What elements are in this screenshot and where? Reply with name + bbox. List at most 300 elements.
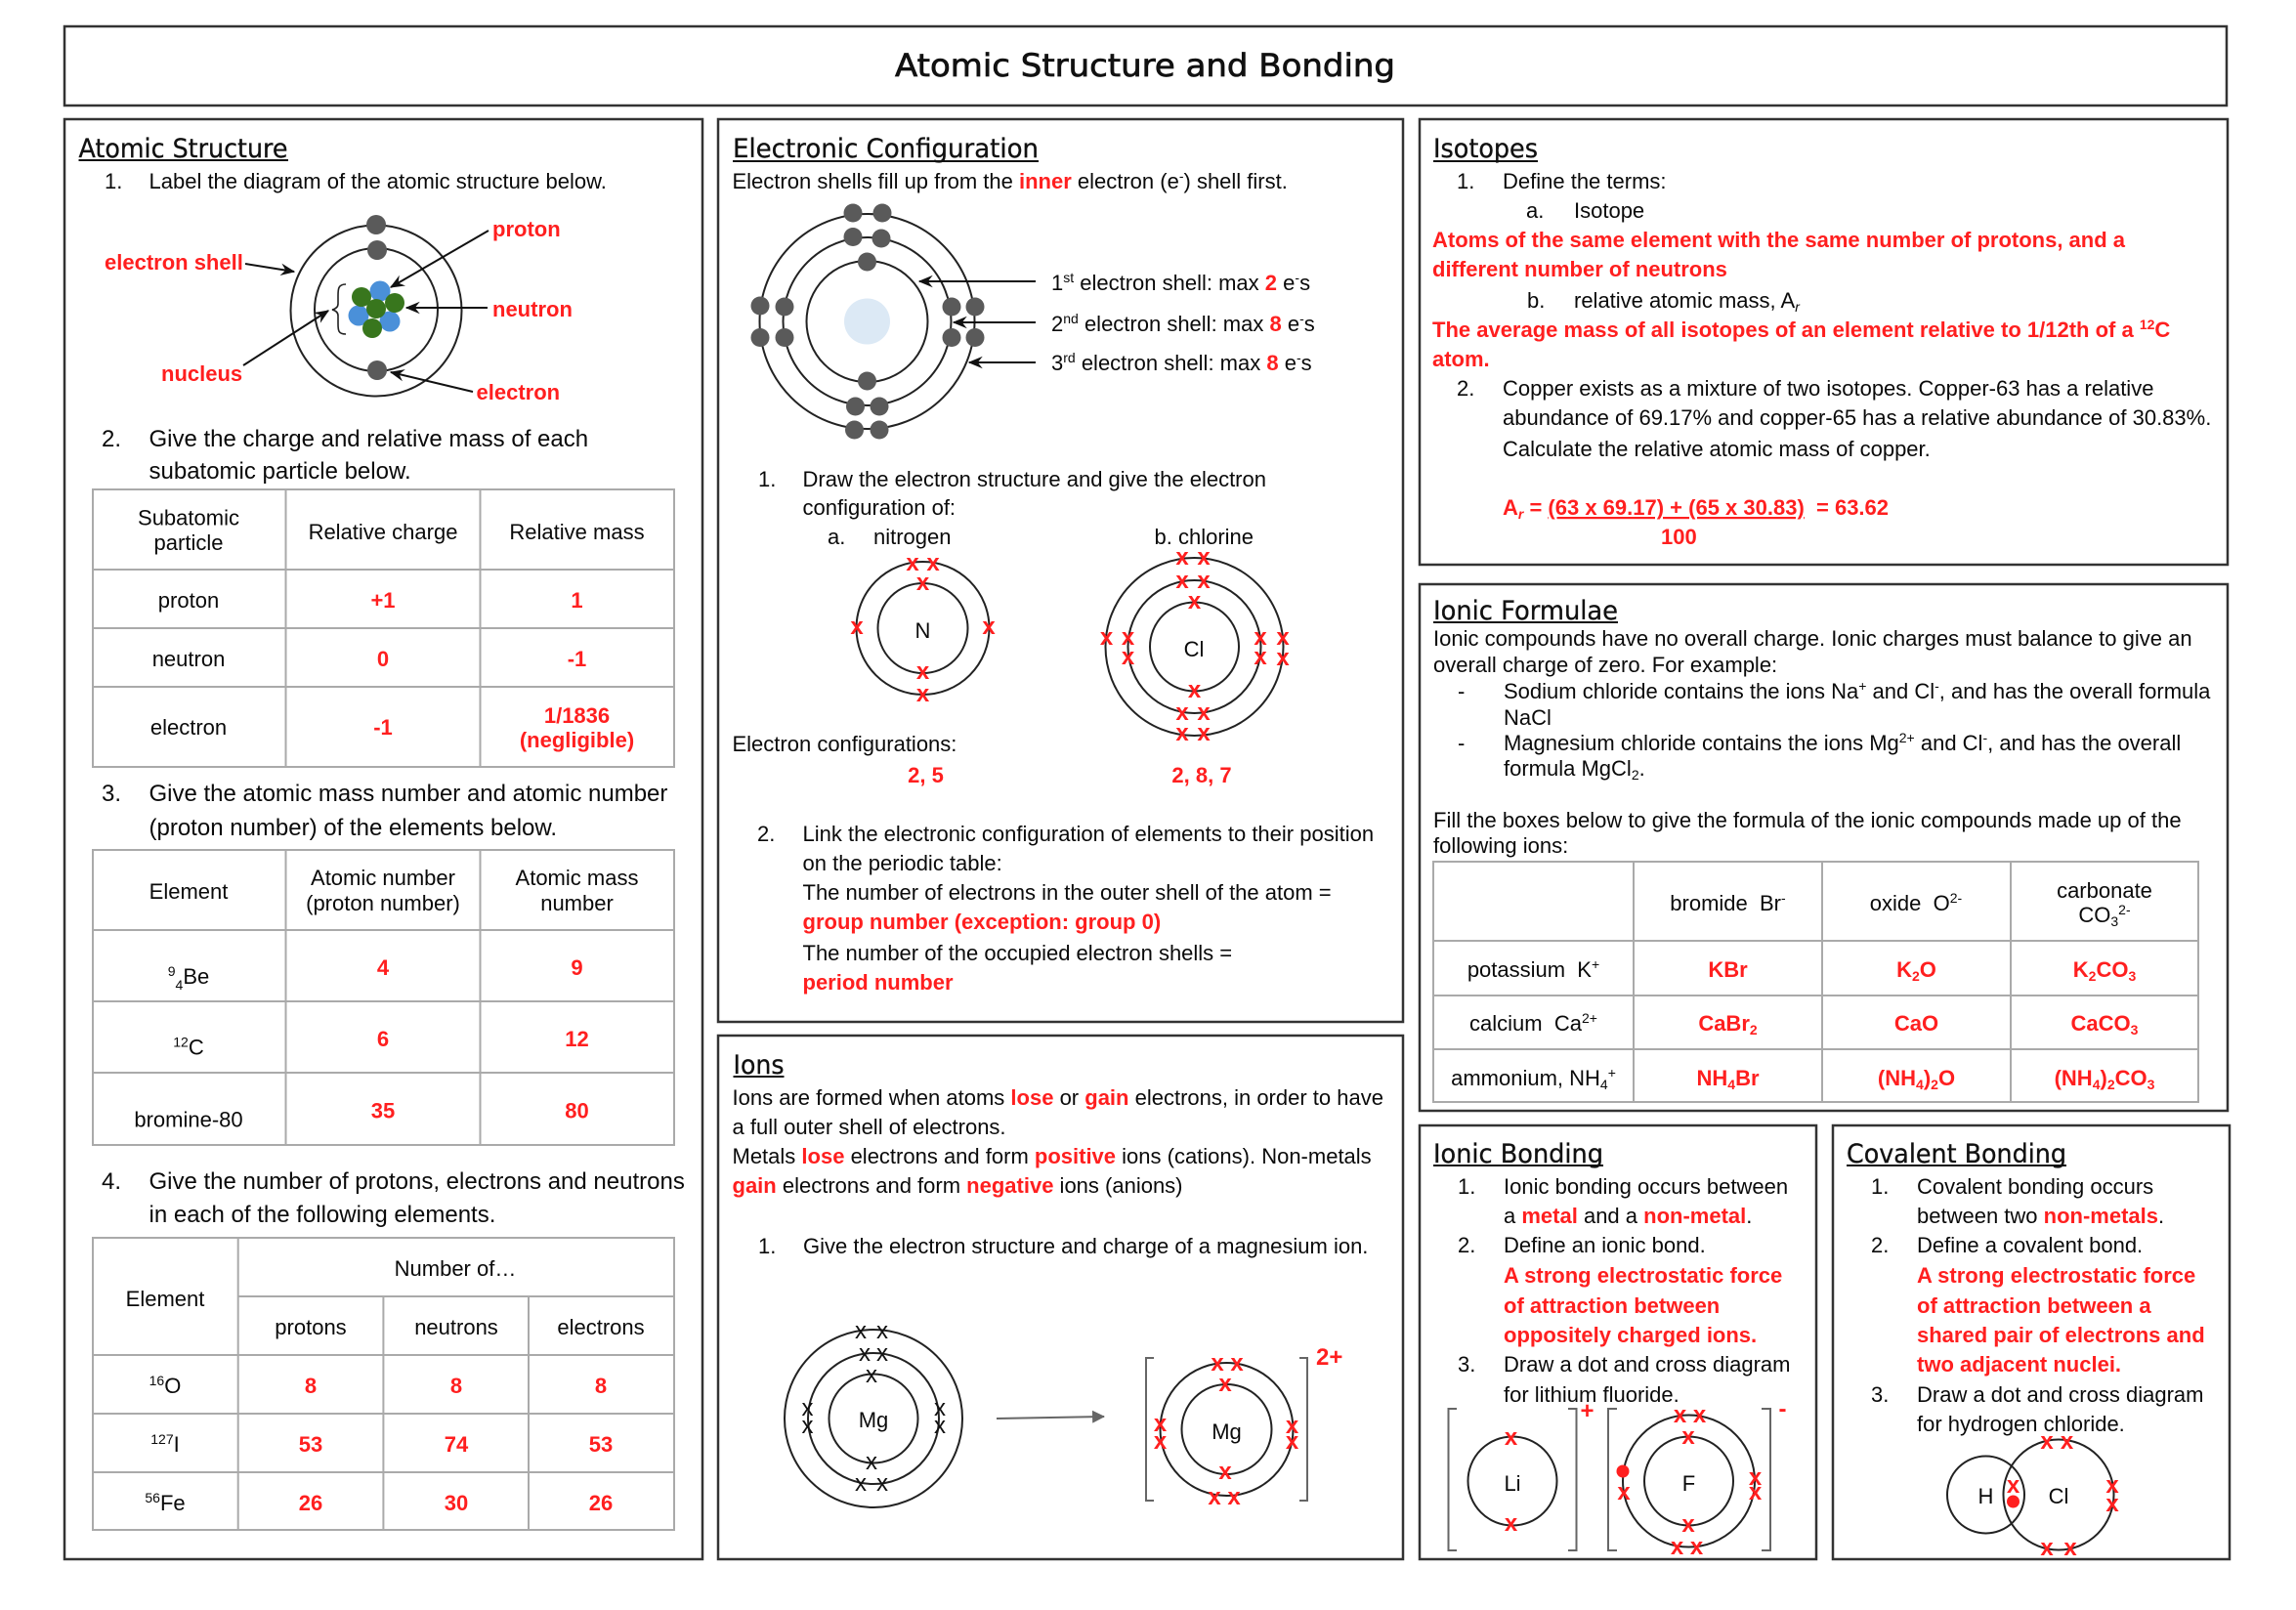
question 1 text: 1. <box>758 467 776 491</box>
table: ionic compounds: + <box>1608 1065 1616 1080</box>
diagram: nitrogen atom: x <box>850 614 864 640</box>
diagram: magnesium ion: x <box>1218 1459 1232 1485</box>
table: subatomic particles <box>93 489 674 767</box>
table: ionic compounds: ammonium, NH <box>1451 1066 1600 1090</box>
covalent bonding text: between two non-metals. <box>1917 1204 2164 1228</box>
table: protons neutrons electrons: 56 <box>145 1490 160 1505</box>
diagram: magnesium atom: x <box>859 1340 871 1367</box>
diagram: fluoride ion: x <box>1749 1464 1763 1491</box>
table: ionic compounds: 3 <box>2131 1022 2139 1038</box>
table: ionic compounds: 2 <box>2107 1077 2115 1092</box>
table: elements: (proton number) <box>306 891 460 915</box>
table: elements: Element <box>149 879 228 904</box>
table: ionic compounds: 2- <box>2118 902 2131 917</box>
table: elements: 4 <box>377 955 390 980</box>
copper question: abundance of 69.17% and copper-65 has a relative abundance of 30.83%. <box>1503 405 2211 430</box>
table: protons neutrons electrons: 127 <box>150 1431 174 1447</box>
isotope definitions <box>1432 169 2170 371</box>
table: ionic compounds: CO <box>2115 1066 2147 1090</box>
panel: ions <box>718 1036 1403 1559</box>
table: subatomic particles: (negligible) <box>520 728 634 752</box>
table: protons neutrons electrons: Element <box>126 1287 204 1311</box>
diagram: fluoride ion: x <box>1671 1534 1684 1560</box>
ionic bonding text: for lithium fluoride. <box>1504 1382 1679 1407</box>
ionic formulae text: Sodium chloride contains the ions Na <box>1504 679 1858 703</box>
table: ionic compounds: ) <box>2100 1066 2107 1090</box>
diagram: electron shells: electron shell: max <box>1079 312 1269 336</box>
title: Atomic Structure and Bonding <box>895 47 1395 84</box>
diagram: hydrogen chloride: x <box>2105 1491 2119 1517</box>
table: ionic compounds: (NH <box>2055 1066 2093 1090</box>
question 2 text: Link the electronic configuration of elements to their position <box>803 822 1374 846</box>
diagram: chlorine atom: x <box>1276 624 1290 651</box>
diagram: electron shells: 3 <box>1051 351 1063 375</box>
diagram: magnesium atom: Mg <box>859 1408 888 1432</box>
table: elements: number <box>540 891 614 915</box>
isotope definitions: Isotope <box>1574 198 1644 223</box>
table: elements: C <box>189 1036 204 1059</box>
question 1 text: nitrogen <box>873 525 952 549</box>
table: ionic compounds: 2+ <box>1582 1010 1597 1026</box>
diagram: fluoride ion: x <box>1749 1479 1763 1505</box>
table: protons neutrons electrons: 74 <box>445 1432 469 1457</box>
covalent bonding text: Define a covalent bond. <box>1917 1233 2143 1257</box>
covalent bonding text: of attraction between a <box>1917 1293 2151 1318</box>
arrow <box>997 1417 1104 1419</box>
table: subatomic particles: electron <box>150 715 227 740</box>
diagram: magnesium atom: x <box>934 1395 946 1421</box>
diagram: labelled atom: nucleus <box>161 361 242 386</box>
diagram: nitrogen atom: x <box>916 658 930 685</box>
table: subatomic particles: Relative charge <box>309 520 457 544</box>
diagram: fluoride ion <box>1608 1396 1786 1560</box>
diagram: labelled atom: electron shell <box>105 250 243 275</box>
diagram: nitrogen atom: x <box>926 550 940 576</box>
diagram: magnesium ion: 2+ <box>1316 1344 1342 1371</box>
question 2 <box>102 426 588 485</box>
diagram: electron shells: 2 <box>1051 312 1063 336</box>
table: ionic compounds: bromide Br <box>1670 891 1781 915</box>
ions text: a full outer shell of electrons. <box>733 1115 1006 1139</box>
table: ionic compounds: potassium K <box>1467 957 1592 982</box>
table: protons neutrons electrons: Number of… <box>395 1256 516 1281</box>
table: elements: 12 <box>565 1027 589 1051</box>
diagram: hydrogen chloride: H <box>1978 1484 1993 1508</box>
ionic formulae text: , and has the overall formula <box>1939 679 2211 703</box>
ionic formulae text: - <box>1458 731 1465 755</box>
table: elements: bromine-80 <box>134 1108 243 1131</box>
ionic bonding text <box>1458 1174 1790 1407</box>
covalent bonding text: shared pair of electrons and <box>1917 1323 2205 1347</box>
diagram: nitrogen atom: x <box>916 681 930 707</box>
ionic formulae text <box>1433 626 2211 858</box>
table: subatomic particles: 1/1836 <box>544 703 610 728</box>
diagram: magnesium ion: x <box>1218 1371 1232 1397</box>
ionic formulae text: Magnesium chloride contains the ions Mg <box>1504 731 1899 755</box>
diagram: electron shells: 8 e <box>1269 312 1299 336</box>
diagram: hydrogen chloride: Cl <box>2049 1484 2068 1508</box>
covalent bonding text: Draw a dot and cross diagram <box>1917 1382 2203 1407</box>
diagram: chlorine atom: x <box>1254 644 1267 670</box>
table: ionic compounds: K <box>1896 957 1912 982</box>
heading: covalent bonding: Covalent Bonding <box>1847 1139 2066 1169</box>
ionic bonding text: 3. <box>1458 1352 1475 1377</box>
question 1 text: Draw the electron structure and give the electron <box>803 467 1266 491</box>
question: 1. <box>758 1234 776 1258</box>
table: ionic compounds: 2 <box>1912 968 1920 984</box>
question 1 text <box>758 467 1266 549</box>
diagram: nitrogen atom <box>850 550 996 707</box>
table: protons neutrons electrons: 53 <box>299 1432 322 1457</box>
diagram: fluoride ion: - <box>1778 1396 1786 1422</box>
table: ionic compounds: CO <box>2096 957 2128 982</box>
table: protons neutrons electrons: I <box>174 1432 180 1457</box>
question 3: Give the atomic mass number and atomic number <box>149 781 667 807</box>
ionic bonding text: of attraction between <box>1504 1293 1720 1318</box>
diagram: chlorine atom: x <box>1122 624 1135 651</box>
diagram: electron shells: rd <box>1063 350 1076 365</box>
question 2 text: period number <box>803 970 954 995</box>
diagram: fluoride ion: x <box>1681 1423 1695 1450</box>
ions text <box>733 1085 1383 1198</box>
question 2: 2. <box>102 426 121 452</box>
diagram: chlorine atom: x <box>1175 544 1189 571</box>
table: ionic compounds: CO <box>2078 903 2110 927</box>
table: ionic compounds: 3 <box>2147 1077 2155 1092</box>
diagram: electron shells: 8 e <box>1266 351 1297 375</box>
diagram: lithium ion: x <box>1505 1424 1518 1451</box>
covalent bonding text: A strong electrostatic force <box>1917 1263 2195 1288</box>
diagram: chlorine atom: x <box>1197 568 1211 594</box>
table: protons neutrons electrons: 26 <box>299 1491 322 1515</box>
diagram: magnesium ion <box>1146 1344 1342 1510</box>
diagram: electron shells: s <box>1299 271 1310 295</box>
covalent bonding text: 2. <box>1871 1233 1889 1257</box>
table: ionic compounds: 2 <box>2089 968 2097 984</box>
table: ionic compounds: CaCO <box>2071 1011 2131 1036</box>
ionic formulae text: overall charge of zero. For example: <box>1433 653 1777 677</box>
question 4: 4. <box>102 1168 121 1195</box>
copper question <box>1457 376 2211 549</box>
heading: atomic structure: Atomic Structure <box>78 134 287 164</box>
table: subatomic particles: proton <box>158 588 219 613</box>
electron configurations: 2, 5 <box>908 763 944 787</box>
ionic formulae text: - <box>1935 678 1939 694</box>
table: ionic compounds: oxide O <box>1870 891 1950 915</box>
diagram: chlorine atom: x <box>1276 645 1290 671</box>
diagram: hydrogen chloride: x <box>2061 1428 2074 1455</box>
copper question: 2. <box>1457 376 1474 401</box>
question 4 <box>102 1168 685 1228</box>
table: protons neutrons electrons <box>93 1238 674 1530</box>
table: ionic compounds: K <box>2073 957 2089 982</box>
diagram: fluoride ion: x <box>1674 1402 1687 1428</box>
question 2 text: on the periodic table: <box>803 851 1002 875</box>
diagram: chlorine atom: x <box>1197 699 1211 726</box>
table: ionic compounds: CaO <box>1894 1011 1938 1036</box>
table: elements: 35 <box>371 1098 395 1123</box>
ionic formulae text: , and has the overall <box>1987 731 2181 755</box>
table: elements: Atomic mass <box>516 866 638 890</box>
question 2 text <box>757 822 1374 995</box>
table: protons neutrons electrons: 30 <box>445 1491 468 1515</box>
copper question: A <box>1503 495 1518 520</box>
table: subatomic particles: 1 <box>571 588 583 613</box>
question 2 text: The number of electrons in the outer shell of the atom = <box>803 880 1332 905</box>
diagram: magnesium ion: x <box>1286 1413 1299 1439</box>
table: ionic compounds <box>1433 862 2198 1102</box>
table: elements: 4 <box>176 977 184 993</box>
diagram: labelled atom: electron <box>477 380 560 404</box>
isotope definitions: 12 <box>2140 317 2155 332</box>
diagram: nitrogen atom: x <box>982 614 996 640</box>
panel: atomic structure <box>64 119 702 1559</box>
diagram: lithium ion: x <box>1505 1510 1518 1537</box>
table: subatomic particles: Subatomic <box>138 506 239 530</box>
diagram: nitrogen atom: x <box>916 570 930 596</box>
table: elements <box>93 850 674 1145</box>
question 2: Give the charge and relative mass of each <box>149 426 588 452</box>
ionic formulae text: 2+ <box>1899 730 1915 745</box>
isotope definitions: a. <box>1526 198 1544 223</box>
diagram: magnesium ion: x <box>1208 1484 1221 1510</box>
title <box>64 26 2227 106</box>
diagram: electron shells: 1 <box>1051 271 1063 295</box>
diagram: chlorine atom: x <box>1197 720 1211 746</box>
isotope definitions: b. <box>1527 288 1545 313</box>
question: Give the electron structure and charge of a magnesium ion. <box>803 1234 1368 1258</box>
panel: electronic configuration <box>718 119 1403 1022</box>
diagram: electron shells <box>750 203 1315 440</box>
diagram: hydrogen chloride: x <box>2105 1472 2119 1499</box>
diagram: magnesium atom: x <box>866 1449 877 1475</box>
table: ionic compounds: 4 <box>1600 1077 1608 1092</box>
diagram: magnesium ion: x <box>1154 1428 1168 1455</box>
diagram: electron shells: - <box>1297 350 1301 365</box>
heading: isotopes: Isotopes <box>1433 134 1538 164</box>
ionic bonding text: Ionic bonding occurs between <box>1504 1174 1788 1199</box>
isotope definitions: atom. <box>1432 347 1490 371</box>
ionic formulae text: and Cl <box>1915 731 1982 755</box>
table: ionic compounds: 2 <box>1931 1077 1938 1092</box>
table: protons neutrons electrons: neutrons <box>414 1315 498 1339</box>
copper question: r <box>1518 506 1525 522</box>
copper question: 100 <box>1661 525 1697 549</box>
table: ionic compounds: O <box>1920 957 1936 982</box>
table: subatomic particles: neutron <box>152 647 225 671</box>
heading: ionic formulae: Ionic Formulae <box>1433 596 1618 626</box>
diagram: magnesium ion: Mg <box>1212 1419 1242 1444</box>
diagram: magnesium atom: x <box>876 1470 888 1497</box>
ionic formulae text: following ions: <box>1433 833 1568 858</box>
intro text: ) shell first. <box>1184 169 1288 193</box>
table: ionic compounds: O <box>1938 1066 1955 1090</box>
question 1: Label the diagram of the atomic structure below. <box>149 169 607 193</box>
ionic formulae text: NaCl <box>1504 705 1552 730</box>
table: elements: Be <box>183 964 209 989</box>
diagram: lithium ion: Li <box>1504 1471 1521 1496</box>
table: ionic compounds: KBr <box>1708 957 1748 982</box>
question 2 text: The number of the occupied electron shells = <box>803 941 1232 965</box>
question 1 text: a. <box>828 525 845 549</box>
table: subatomic particles: 0 <box>377 647 389 671</box>
table: ionic compounds: Br <box>1735 1066 1760 1090</box>
table: ionic compounds: 4 <box>2093 1077 2101 1092</box>
diagram: chlorine atom: x <box>1188 677 1202 703</box>
diagram: magnesium atom: x <box>855 1470 867 1497</box>
table: ionic compounds: 2- <box>1950 890 1963 906</box>
ions text: Metals lose electrons and form positive ions (cations). Non-metals <box>733 1144 1372 1168</box>
diagram: chlorine atom <box>1100 544 1290 746</box>
question 3: (proton number) of the elements below. <box>149 815 557 841</box>
diagram: magnesium atom: x <box>801 1413 813 1439</box>
question 2 text: group number (exception: group 0) <box>803 910 1161 934</box>
isotope definitions: 1. <box>1457 169 1474 193</box>
isotope definitions: Atoms of the same element with the same number of protons, and a <box>1432 228 2126 252</box>
diagram: lithium ion <box>1448 1398 1594 1550</box>
covalent bonding text <box>1871 1174 2205 1436</box>
table: elements: 80 <box>565 1098 589 1123</box>
question 3 <box>102 781 667 841</box>
question 2: subatomic particle below. <box>149 458 411 485</box>
covalent bonding text: 1. <box>1871 1174 1889 1199</box>
covalent bonding text: Covalent bonding occurs <box>1917 1174 2153 1199</box>
panel: ionic formulae <box>1420 584 2228 1111</box>
diagram: fluoride ion: F <box>1682 1471 1695 1496</box>
question 2 text: 2. <box>757 822 775 846</box>
diagram: electron shells: s <box>1301 351 1312 375</box>
diagram: magnesium atom: x <box>876 1340 888 1367</box>
table: protons neutrons electrons: O <box>164 1374 181 1398</box>
diagram: magnesium ion: x <box>1230 1350 1244 1377</box>
table: subatomic particles: Relative mass <box>509 520 645 544</box>
ionic bonding text: Draw a dot and cross diagram <box>1504 1352 1790 1377</box>
table: ionic compounds: 4 <box>1727 1077 1735 1092</box>
diagram: chlorine atom: x <box>1188 588 1202 614</box>
covalent bonding text: two adjacent nuclei. <box>1917 1352 2121 1377</box>
ionic formulae text: - <box>1982 730 1987 745</box>
ionic formulae text: - <box>1458 679 1465 703</box>
diagram: electron shells: electron shell: max <box>1074 271 1265 295</box>
diagram: magnesium atom: x <box>855 1318 867 1344</box>
table: ionic compounds: - <box>1781 890 1786 906</box>
table: protons neutrons electrons: 8 <box>305 1374 317 1398</box>
diagram: chlorine atom: x <box>1254 624 1267 651</box>
diagram: labelled atom <box>105 215 573 404</box>
diagram: magnesium ion: x <box>1211 1350 1224 1377</box>
copper question: = <box>1523 495 1548 520</box>
diagram: fluoride ion: x <box>1681 1511 1695 1538</box>
diagram: fluoride ion: x <box>1690 1534 1704 1560</box>
table: subatomic particles: particle <box>154 530 223 555</box>
diagram: chlorine atom: Cl <box>1184 637 1204 661</box>
question 1: 1. <box>105 169 122 193</box>
ionic formulae text: + <box>1858 678 1866 694</box>
diagram: chlorine atom: x <box>1175 699 1189 726</box>
table: protons neutrons electrons: 8 <box>450 1374 462 1398</box>
table: elements: 9 <box>168 963 176 979</box>
isotope definitions: Define the terms: <box>1503 169 1667 193</box>
diagram: magnesium ion: x <box>1154 1411 1168 1437</box>
ionic formulae text: formula MgCl <box>1504 756 1632 781</box>
table: protons neutrons electrons: Fe <box>160 1491 186 1515</box>
ionic formulae text: Ionic compounds have no overall charge. Ionic charges must balance to give an <box>1433 626 2192 651</box>
electron configurations <box>733 732 1232 787</box>
electron configurations: Electron configurations: <box>733 732 957 756</box>
ionic bonding text: Define an ionic bond. <box>1504 1233 1706 1257</box>
diagram: hydrogen chloride <box>1947 1428 2119 1561</box>
isotope definitions: The average mass of all isotopes of an element relative to 1/12th of a <box>1432 318 2134 342</box>
ionic bonding text: oppositely charged ions. <box>1504 1323 1757 1347</box>
diagram: chlorine atom: x <box>1100 624 1114 651</box>
table: ionic compounds: 3 <box>2110 913 2118 929</box>
diagram: hydrogen chloride: x <box>2040 1428 2054 1455</box>
ionic formulae text: 2 <box>1632 767 1639 783</box>
table: protons neutrons electrons: 8 <box>595 1374 607 1398</box>
diagram: magnesium ion: x <box>1227 1484 1241 1510</box>
table: protons neutrons electrons: protons <box>275 1315 347 1339</box>
ionic formulae text: Fill the boxes below to give the formula of the ionic compounds made up of the <box>1433 808 2182 832</box>
ionic bonding text: A strong electrostatic force <box>1504 1263 1782 1288</box>
table: elements: 12 <box>173 1034 189 1049</box>
diagram: labelled atom: neutron <box>492 297 573 321</box>
table: subatomic particles: +1 <box>370 588 396 613</box>
diagram: magnesium ion: x <box>1286 1428 1299 1455</box>
ionic bonding text: 1. <box>1458 1174 1475 1199</box>
ions text: Ions are formed when atoms lose or gain electrons, in order to have <box>733 1085 1383 1110</box>
covalent bonding text: for hydrogen chloride. <box>1917 1412 2125 1436</box>
isotope definitions: different number of neutrons <box>1432 257 1727 281</box>
copper question: Copper exists as a mixture of two isotopes. Copper-63 has a relative <box>1503 376 2153 401</box>
isotope definitions: C <box>2154 318 2170 342</box>
diagram: electron shells: nd <box>1063 311 1079 326</box>
intro text: Electron shells fill up from the inner electron (e <box>733 169 1179 193</box>
table: subatomic particles: -1 <box>568 647 586 671</box>
panel: ionic bonding <box>1420 1125 1816 1560</box>
table: elements: Atomic number <box>311 866 455 890</box>
table: ionic compounds: CaBr <box>1698 1011 1750 1036</box>
question 3: 3. <box>102 781 121 807</box>
isotope definitions: relative atomic mass, A <box>1574 288 1795 313</box>
electron configurations: 2, 8, 7 <box>1171 763 1232 787</box>
heading: ionic bonding: Ionic Bonding <box>1433 1139 1603 1169</box>
diagram: electron shells: st <box>1063 270 1074 285</box>
table: protons neutrons electrons: 16 <box>149 1373 164 1388</box>
heading: ions: Ions <box>733 1050 784 1080</box>
ions text: gain electrons and form negative ions (anions) <box>733 1173 1183 1198</box>
table: protons neutrons electrons: electrons <box>557 1315 645 1339</box>
heading: electronic configuration: Electronic Configuration <box>733 134 1039 164</box>
diagram: hydrogen chloride: x <box>2063 1535 2077 1561</box>
ionic bonding text: 2. <box>1458 1233 1475 1257</box>
table: ionic compounds: 3 <box>2128 968 2136 984</box>
table: ionic compounds: 2 <box>1750 1022 1758 1038</box>
ionic bonding text: a metal and a non-metal. <box>1504 1204 1752 1228</box>
covalent bonding text: 3. <box>1871 1382 1889 1407</box>
table: ionic compounds: NH <box>1696 1066 1727 1090</box>
diagram: fluoride ion: x <box>1693 1402 1707 1428</box>
copper question: Calculate the relative atomic mass of copper. <box>1503 437 1931 461</box>
diagram: chlorine atom: x <box>1197 544 1211 571</box>
table: elements: 6 <box>377 1027 389 1051</box>
question 4: Give the number of protons, electrons and neutrons <box>149 1168 685 1195</box>
diagram: hydrogen chloride: x <box>2007 1472 2020 1499</box>
diagram: magnesium atom: x <box>801 1395 813 1421</box>
panel: covalent bonding <box>1833 1125 2230 1561</box>
question 4: in each of the following elements. <box>149 1202 495 1228</box>
copper question: (63 x 69.17) + (65 x 30.83) = 63.62 <box>1548 495 1889 520</box>
table: ionic compounds: + <box>1592 956 1599 972</box>
